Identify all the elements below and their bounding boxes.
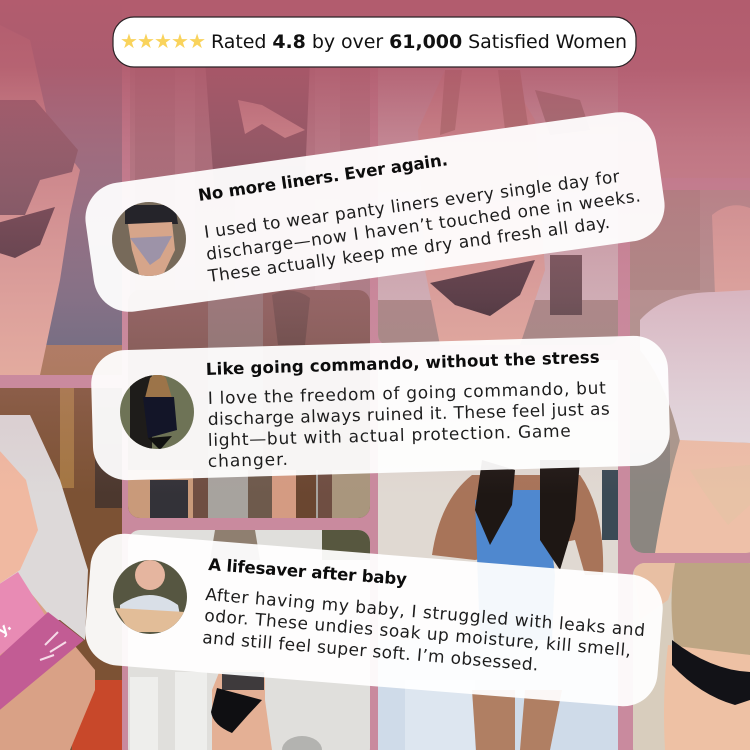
quote 3: and still feel super soft. I’m obsessed. bbox=[202, 628, 539, 676]
heading 1: No more liners. Ever again. bbox=[197, 150, 449, 205]
testimonial card 1 bbox=[81, 108, 669, 316]
avatar 3 bbox=[112, 560, 188, 635]
heading 2: Like going commando, without the stress bbox=[206, 348, 600, 379]
quote 3: After having my baby, I struggled with leaks and bbox=[205, 585, 646, 641]
photo: black briefs by white door, bottom centre bbox=[128, 530, 370, 750]
rating text: Rated 4.8 by over 61,000 Satisfied Women bbox=[211, 31, 627, 53]
photo: dark outfit with curtains, top middle bbox=[130, 68, 370, 300]
quote 1: These actually keep me dry and fresh all day. bbox=[206, 213, 611, 287]
quote 2: discharge always ruined it. These feel just as bbox=[208, 399, 610, 430]
rating pill bbox=[113, 17, 636, 67]
heading 3: A lifesaver after baby bbox=[208, 555, 408, 589]
photo: smiling woman with pink box, bottom left bbox=[0, 388, 122, 750]
avatar 2 bbox=[120, 375, 194, 449]
testimonial card 3 bbox=[83, 531, 665, 709]
photo: dressing room legs, centre bbox=[128, 290, 370, 518]
photo: woman in grey tee, top left bbox=[0, 58, 122, 375]
quote 2: light—but with actual protection. Game bbox=[208, 422, 571, 451]
photo: woman in blue tank, centre right bbox=[378, 460, 618, 750]
quote 1: I used to wear panty liners every single day for bbox=[203, 167, 621, 243]
quote 1 bbox=[203, 167, 642, 287]
quote 1: discharge—now I haven’t touched one in weeks. bbox=[205, 186, 642, 265]
photo: woman with dark briefs, top centre right bbox=[378, 74, 618, 343]
quote 2: changer. bbox=[208, 450, 288, 472]
photo: pink tinted panel, top right bbox=[660, 0, 750, 178]
photo: woman in white tee, right bbox=[630, 190, 750, 553]
quote 2: I love the freedom of going commando, but bbox=[208, 379, 606, 409]
quote 3: odor. These undies soak up moisture, kill smell, bbox=[204, 606, 632, 661]
photo: beige top with black briefs, bottom right bbox=[633, 563, 750, 750]
avatar 1 bbox=[112, 202, 186, 276]
testimonial card 2 bbox=[90, 335, 671, 481]
icon: five gold stars: ★★★★★ bbox=[120, 29, 206, 53]
quote 2 bbox=[208, 379, 610, 472]
quote 3 bbox=[202, 585, 646, 676]
icon: leaf marks on box bbox=[40, 632, 66, 660]
